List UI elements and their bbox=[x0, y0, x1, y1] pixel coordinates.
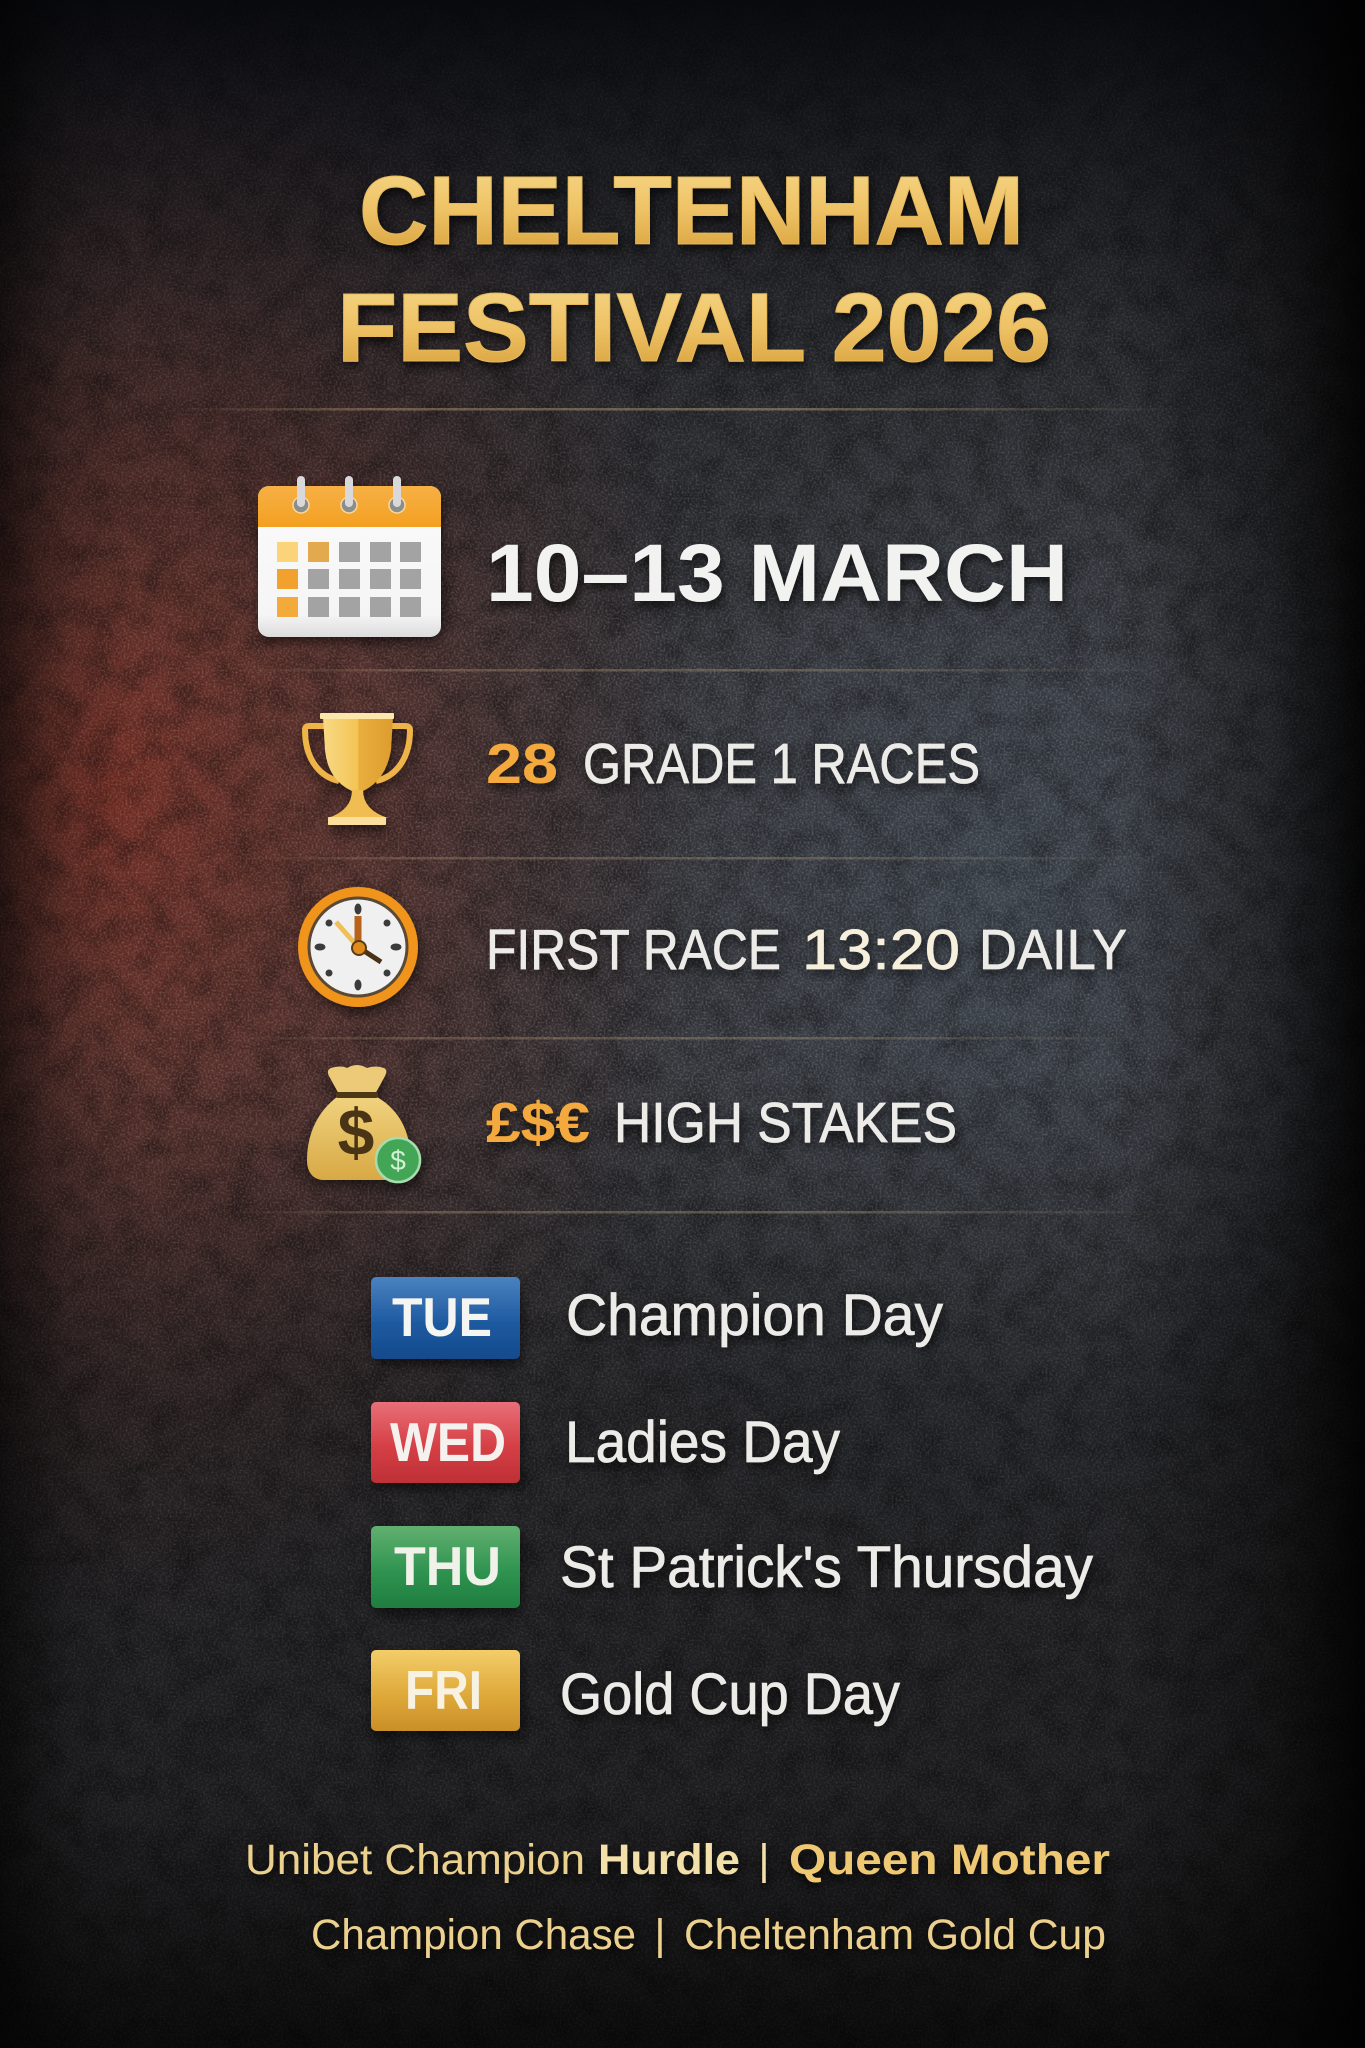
icon: money bag: $ bbox=[390, 1145, 406, 1176]
badge: Thursday: THU bbox=[394, 1535, 501, 1597]
stat: first race: 13:20 bbox=[802, 918, 960, 982]
footer: feature races: | bbox=[758, 1836, 770, 1884]
icon: trophy bbox=[305, 713, 410, 825]
stat: grade 1 races: 28 bbox=[486, 732, 558, 796]
stat: first race: DAILY bbox=[979, 918, 1127, 982]
badge: Tuesday: TUE bbox=[392, 1286, 492, 1348]
label: St Patrick's Thursday: St Patrick's Thursday bbox=[560, 1535, 1093, 1600]
title: FESTIVAL 2026 bbox=[337, 273, 1051, 382]
title bbox=[337, 156, 1051, 382]
stat: grade 1 races: GRADE 1 RACES bbox=[583, 732, 980, 796]
stat: high stakes bbox=[486, 1091, 957, 1155]
badge: Thursday bbox=[371, 1526, 520, 1608]
date heading: 10–13 MARCH bbox=[486, 528, 1068, 619]
stat: first race bbox=[486, 918, 1127, 982]
footer: feature races: Cheltenham Gold Cup bbox=[684, 1911, 1106, 1959]
icon: clock bbox=[298, 887, 418, 1007]
footer: feature races: Hurdle bbox=[598, 1836, 740, 1884]
footer: feature races: Unibet Champion bbox=[245, 1836, 585, 1884]
stat: first race: FIRST RACE bbox=[486, 918, 781, 982]
stat: high stakes: £$€ bbox=[486, 1091, 590, 1155]
label: Ladies Day: Ladies Day bbox=[565, 1410, 840, 1475]
badge: Friday bbox=[371, 1650, 520, 1731]
stat: high stakes: HIGH STAKES bbox=[614, 1091, 957, 1155]
badge: Tuesday bbox=[371, 1277, 520, 1359]
footer: feature races: | bbox=[654, 1911, 666, 1959]
badge: Wednesday bbox=[371, 1402, 520, 1483]
title: CHELTENHAM bbox=[359, 156, 1024, 265]
icon: calendar bbox=[258, 476, 441, 637]
label: Champion Day: Champion Day bbox=[566, 1283, 943, 1348]
footer: feature races: Champion Chase bbox=[311, 1911, 636, 1959]
footer: feature races: Queen Mother bbox=[789, 1836, 1110, 1884]
badge: Wednesday: WED bbox=[390, 1411, 506, 1473]
badge: Friday: FRI bbox=[405, 1659, 482, 1721]
footer: feature races bbox=[245, 1836, 1110, 1959]
icon: money bag bbox=[307, 1065, 420, 1182]
icon: money bag: $ bbox=[338, 1095, 374, 1169]
label: Gold Cup Day: Gold Cup Day bbox=[560, 1662, 900, 1727]
